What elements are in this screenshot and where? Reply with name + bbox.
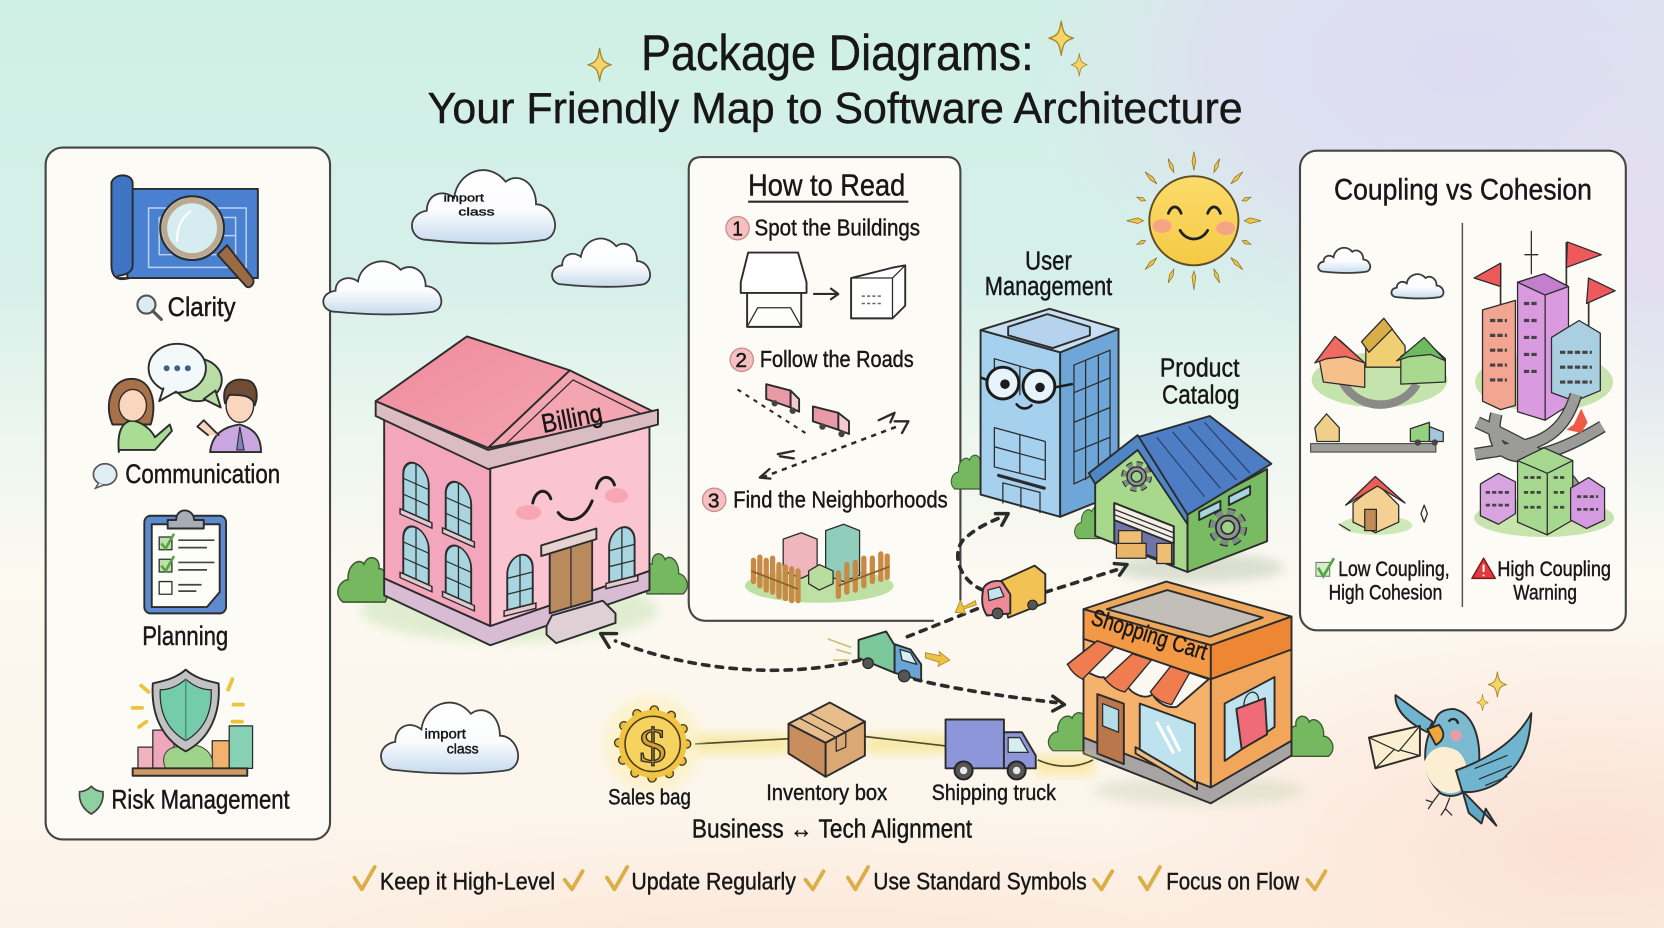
glasses face: [982, 367, 1072, 408]
tail: [1462, 791, 1496, 826]
roller door and boxes: [1114, 503, 1174, 565]
tip: use standard symbols: Use Standard Symbols: [873, 868, 1087, 895]
front wall: [1095, 444, 1188, 572]
beak: [1427, 725, 1443, 745]
heading: Coupling vs Cohesion: [1334, 174, 1592, 207]
roads diagram: [738, 384, 908, 479]
side wall: [1188, 469, 1267, 572]
panel: coupling vs cohesion: [1300, 151, 1626, 630]
sun: [1127, 152, 1261, 290]
label: product catalog: Catalog: [1162, 381, 1240, 409]
best practices row: [354, 867, 1325, 895]
icon: building to box: [741, 253, 905, 327]
bird mascot: [1369, 672, 1531, 826]
sparkles around title: [588, 21, 1087, 81]
side wall: [1211, 647, 1292, 801]
building: product catalog: [1075, 416, 1284, 583]
labels: Inventory box: [766, 780, 887, 805]
label: high coupling warning: High Coupling: [1497, 558, 1611, 581]
cloud left: [323, 261, 441, 314]
label: clarity: [137, 292, 236, 322]
step 1: 1: [732, 219, 743, 241]
business tech alignment row: [604, 695, 1094, 843]
feet: [1426, 794, 1452, 815]
label: high coupling warning: Warning: [1513, 582, 1577, 605]
tip: keep it high-level: Keep it High-Level: [380, 868, 555, 895]
billing sign: Billing: [539, 398, 605, 439]
shipping truck: [946, 720, 1036, 779]
icon: two people talking: [109, 344, 261, 452]
building: billing: [338, 336, 687, 645]
tip: focus on flow: Focus on Flow: [1166, 868, 1299, 895]
step 3: 3: [708, 490, 720, 512]
arrow: yellow right: [925, 652, 950, 666]
back wing: [1395, 695, 1433, 732]
warning spark: [1566, 409, 1588, 433]
icon: shield over city: [133, 670, 253, 776]
cloud with code bottom: [381, 703, 518, 773]
face: [516, 477, 628, 520]
roof: [1084, 582, 1292, 645]
tower side: [1060, 329, 1119, 517]
truck: green: [828, 631, 921, 682]
right wall: [490, 422, 649, 626]
label: risk management: Risk Management: [111, 785, 290, 815]
box: [788, 703, 865, 777]
gable: [488, 370, 658, 448]
eye and cheek: [1449, 719, 1458, 724]
windows: [400, 457, 638, 616]
base: [1084, 738, 1292, 803]
tower front: [981, 330, 1060, 517]
sparkles: [1477, 672, 1506, 711]
windows: [994, 350, 1110, 513]
dependency arrows: [601, 514, 1127, 711]
labels: Shipping truck: [932, 780, 1057, 805]
building: user management: [951, 309, 1119, 517]
label: low coupling: High Cohesion: [1329, 582, 1442, 605]
shopping bag: [1236, 692, 1267, 749]
left wall: [384, 416, 490, 626]
title: Package Diagrams:: [641, 25, 1034, 81]
door and window: [1097, 677, 1275, 790]
connector glows: [695, 734, 1094, 775]
coin: [604, 695, 701, 793]
envelope: [1369, 726, 1420, 768]
cloud with code bottom: class: [447, 741, 479, 756]
label: communication: Communication: [125, 459, 280, 489]
bad scene towers: [1474, 231, 1615, 420]
good scene houses: [1312, 318, 1448, 408]
cloud with code: import: [444, 193, 484, 205]
eaves: [376, 401, 658, 469]
label: user management: Management: [985, 273, 1112, 301]
front wall: [1084, 637, 1211, 801]
roof: [376, 336, 570, 448]
awning: [1068, 641, 1209, 707]
panel: benefits: [46, 148, 330, 839]
icon: blueprint with magnifier: [111, 175, 258, 287]
good scene road and truck: [1311, 414, 1443, 452]
panel: how to read: [689, 157, 960, 621]
neighborhood with fence: [745, 524, 894, 603]
base: [384, 571, 649, 645]
step 2: Follow the Roads: [760, 346, 914, 372]
step 2: 2: [735, 350, 747, 372]
cloud: [552, 239, 650, 287]
truck: yellow: [982, 566, 1045, 619]
label: product catalog: Product: [1160, 355, 1240, 383]
tower roof: [981, 309, 1119, 352]
bad scene lower buildings: [1474, 448, 1614, 537]
cloud with code bottom: import: [424, 727, 466, 742]
label: low coupling: Low Coupling,: [1338, 558, 1450, 581]
sign text: Shopping Cart: [1088, 604, 1211, 665]
title: [428, 25, 1243, 133]
arrow: yellow left: [955, 601, 976, 613]
heading: How to Read: [748, 167, 905, 202]
icon: clipboard: [144, 510, 226, 613]
label: low coupling: [1316, 558, 1450, 605]
label: user management: User: [1025, 248, 1072, 276]
gears: [1125, 465, 1148, 488]
cloud with code: [412, 170, 555, 243]
coin: $: [639, 719, 666, 773]
tip: update regularly: Update Regularly: [631, 868, 797, 895]
good scene clouds: [1318, 248, 1443, 298]
label: clarity: Clarity: [168, 292, 236, 322]
label: planning: Planning: [142, 621, 228, 651]
tangled roads: [1475, 395, 1602, 520]
roof: [1138, 416, 1271, 515]
shopping cart store: [1048, 582, 1333, 805]
label: user management: [985, 248, 1112, 301]
labels: [608, 780, 1057, 809]
caption: Business ↔ Tech Alignment: [692, 815, 972, 843]
cloud with code: class: [458, 206, 495, 218]
door: [541, 528, 616, 643]
title: Your Friendly Map to Software Architecture: [428, 85, 1243, 133]
step 1: Spot the Buildings: [755, 215, 920, 241]
body: [1425, 709, 1479, 796]
labels: Sales bag: [608, 784, 691, 809]
step 3: Find the Neighborhoods: [733, 486, 948, 512]
good scene single house: [1339, 476, 1427, 535]
wing: [1456, 713, 1531, 792]
label: product catalog: [1160, 355, 1240, 409]
sign band: [1084, 609, 1211, 679]
label: high coupling warning: [1472, 558, 1611, 605]
